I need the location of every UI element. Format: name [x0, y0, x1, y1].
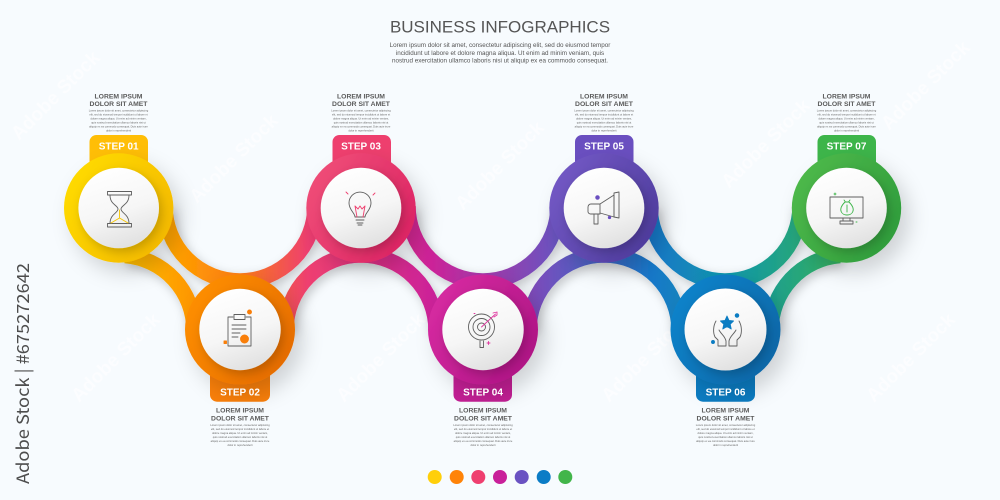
step 07	[792, 135, 901, 263]
watermark pattern: Adobe Stock	[186, 110, 283, 208]
text block: step 01: Lorem ipsum dolor sit amet, consectetur adipiscing	[89, 109, 149, 113]
step 04 disc	[442, 289, 524, 370]
text block: step 04: Lorem ipsum dolor sit amet, consectetur adipiscing	[453, 423, 513, 427]
text block: step 07: DOLOR SIT AMET	[818, 101, 876, 108]
text block: step 04: dolore magna aliqua. Ut enim ad minim veniam,	[455, 431, 511, 435]
step 05 tab	[575, 135, 634, 175]
text block: step 03: aliquip ex ea commodo consequat. Duis aute irure	[332, 125, 391, 129]
text block: step 02: quis nostrud exercitation ullamco laboris nisi ut	[213, 435, 268, 439]
step 07 label: STEP 07	[827, 141, 867, 152]
text block: step 02: LOREM IPSUM	[216, 408, 264, 414]
step 06 disc	[684, 288, 766, 370]
intro paragraph	[390, 42, 610, 65]
step 03 disc	[321, 168, 401, 248]
text block: step 02: elit, sed do eiusmod tempor incididunt ut labore et	[211, 427, 269, 431]
step 04 ring	[428, 274, 538, 384]
step 02 ring	[185, 274, 295, 384]
text block: step 03: LOREM IPSUM	[337, 93, 385, 100]
intro paragraph: nostrud exercitation ullamco laboris nisi ut aliquip ex ea commodo consequat.	[392, 58, 608, 65]
text block: step 02: dolor in reprehenderit	[227, 443, 253, 447]
text block: step 06: dolor in reprehenderit	[713, 443, 738, 447]
text block: step 04: quis nostrud exercitation ullamco laboris nisi ut	[456, 435, 511, 439]
icon: clipboard	[224, 310, 252, 346]
connecting ribbons	[125, 206, 840, 330]
intro paragraph: incididunt ut labore et dolore magna aliqua. Ut enim ad minim veniam, quis	[396, 50, 604, 57]
icon: hands holding star	[712, 314, 741, 346]
text block: step 02: DOLOR SIT AMET	[211, 415, 270, 422]
step 02	[185, 274, 295, 402]
step 02 label: STEP 02	[220, 388, 260, 398]
text block: step 04	[453, 408, 513, 447]
step 01	[64, 135, 173, 263]
step 07 tab	[818, 135, 876, 175]
text block: step 07: dolore magna aliqua. Ut enim ad minim veniam,	[819, 117, 875, 121]
watermark pattern: Adobe Stock	[333, 309, 430, 407]
watermark pattern: Adobe Stock	[452, 117, 549, 215]
watermark pattern	[8, 37, 975, 407]
step 07 disc	[806, 168, 887, 248]
text block: step 05: dolor in reprehenderit	[591, 129, 617, 133]
icon: monitor with money bag	[830, 193, 863, 224]
step 03	[306, 135, 416, 263]
intro paragraph: Lorem ipsum dolor sit amet, consectetur adipiscing elit, sed do eiusmod tempor	[390, 42, 610, 49]
text block: step 04: elit, sed do eiusmod tempor incididunt ut labore et	[454, 427, 512, 431]
watermark pattern: Adobe Stock	[863, 309, 960, 407]
watermark pattern: Adobe Stock	[598, 309, 695, 407]
step 06	[670, 274, 780, 402]
step 04 tab	[454, 370, 512, 402]
text block: step 03: DOLOR SIT AMET	[332, 101, 391, 108]
text block: step 02	[210, 408, 270, 447]
text block: step 05: dolore magna aliqua. Ut enim ad minim veniam,	[576, 117, 632, 121]
step 03 label: STEP 03	[341, 141, 381, 152]
stock credit: Adobe Stock | #675272642	[9, 263, 34, 484]
step 05	[549, 135, 659, 263]
text block: step 02: dolore magna aliqua. Ut enim ad minim veniam,	[212, 431, 268, 435]
step 03 tab	[332, 135, 391, 175]
icon: hourglass	[108, 192, 132, 227]
text block: step 03: dolore magna aliqua. Ut enim ad minim veniam,	[333, 117, 389, 121]
text block: step 07: LOREM IPSUM	[823, 93, 871, 100]
text block: step 06: quis nostrud exercitation ullamco laboris nisi ut	[698, 435, 753, 439]
text block: step 02: aliquip ex ea commodo consequat. Duis aute irure	[211, 439, 270, 443]
text block: step 07: Lorem ipsum dolor sit amet, consectetur adipiscing	[817, 109, 877, 113]
step 05 disc	[564, 168, 644, 248]
text block: step 06: LOREM IPSUM	[702, 408, 750, 414]
text block: step 04: aliquip ex ea commodo consequat. Duis aute irure	[454, 439, 513, 443]
text block: step 07: aliquip ex ea commodo consequat. Duis aute irure	[817, 125, 876, 129]
icon: light bulb	[346, 192, 375, 225]
step 07 ring	[792, 153, 901, 263]
text block: step 01: quis nostrud exercitation ullamco laboris nisi ut	[91, 121, 146, 125]
step 01 ring	[64, 153, 173, 263]
text block: step 05: quis nostrud exercitation ullamco laboris nisi ut	[577, 121, 632, 125]
text block: step 04: LOREM IPSUM	[459, 408, 507, 414]
text block: step 06: aliquip ex ea commodo consequat. Duis aute irure	[696, 439, 755, 443]
text block: step 06: DOLOR SIT AMET	[697, 415, 755, 422]
text block: step 05	[574, 93, 634, 133]
step 03 ring	[306, 153, 416, 263]
text block: step 06	[696, 408, 756, 447]
text block: step 01	[89, 93, 149, 133]
text block: step 01: dolor in reprehenderit	[106, 129, 131, 133]
step 05 ring	[549, 153, 659, 263]
step 02 tab	[210, 370, 270, 402]
text block: step 06: elit, sed do eiusmod tempor incididunt ut labore et	[696, 427, 755, 431]
text block: step 01: dolore magna aliqua. Ut enim ad minim veniam,	[91, 117, 147, 121]
text block: step 03: quis nostrud exercitation ullamco laboris nisi ut	[334, 121, 389, 125]
text block: step 06: Lorem ipsum dolor sit amet, consectetur adipiscing	[696, 423, 756, 427]
text block: step 04: dolor in reprehenderit	[470, 443, 496, 447]
text block: step 03: dolor in reprehenderit	[348, 129, 374, 133]
text block: step 03: elit, sed do eiusmod tempor incididunt ut labore et	[332, 113, 390, 117]
text block: step 07: elit, sed do eiusmod tempor incididunt ut labore et	[817, 113, 876, 117]
text block: step 01: elit, sed do eiusmod tempor incididunt ut labore et	[89, 113, 148, 117]
icon: megaphone	[588, 192, 619, 224]
text block: step 07: quis nostrud exercitation ullamco laboris nisi ut	[819, 121, 874, 125]
step 01 tab	[90, 135, 148, 175]
title: BUSINESS INFOGRAPHICS	[390, 18, 610, 37]
text block: step 05: DOLOR SIT AMET	[575, 101, 634, 108]
text block: step 03: Lorem ipsum dolor sit amet, consectetur adipiscing	[331, 109, 391, 113]
text block: step 03	[331, 93, 391, 133]
text block: step 05: aliquip ex ea commodo consequat. Duis aute irure	[575, 125, 634, 129]
watermark pattern: Adobe Stock	[718, 95, 815, 193]
text block: step 01: aliquip ex ea commodo consequat. Duis aute irure	[89, 125, 148, 129]
step 01 disc	[78, 168, 159, 248]
text block: step 02: Lorem ipsum dolor sit amet, consectetur adipiscing	[210, 423, 270, 427]
icon: target with arrow	[468, 312, 497, 348]
step 06 label: STEP 06	[706, 388, 746, 398]
step 05 label: STEP 05	[584, 141, 624, 152]
watermark pattern: Adobe Stock	[8, 47, 105, 145]
text block: step 05: elit, sed do eiusmod tempor incididunt ut labore et	[575, 113, 633, 117]
step 06 ring	[670, 274, 780, 384]
watermark pattern: Adobe Stock	[878, 37, 975, 135]
watermark pattern: Adobe Stock	[68, 309, 165, 407]
step 06 tab	[696, 370, 755, 402]
text block: step 06: dolore magna aliqua. Ut enim ad minim veniam,	[698, 431, 754, 435]
step 02 disc	[199, 289, 281, 370]
colour legend dots	[428, 470, 572, 484]
text block: step 07	[817, 93, 877, 133]
step 04	[428, 274, 538, 402]
text block: step 05: LOREM IPSUM	[580, 93, 628, 100]
text block: step 01: LOREM IPSUM	[95, 93, 143, 100]
step 01 label: STEP 01	[99, 141, 139, 152]
text block: step 01: DOLOR SIT AMET	[90, 101, 148, 108]
text block: step 05: Lorem ipsum dolor sit amet, consectetur adipiscing	[574, 109, 634, 113]
step 04 label: STEP 04	[463, 388, 503, 398]
text block: step 07: dolor in reprehenderit	[834, 129, 859, 133]
text block: step 04: DOLOR SIT AMET	[454, 415, 513, 422]
